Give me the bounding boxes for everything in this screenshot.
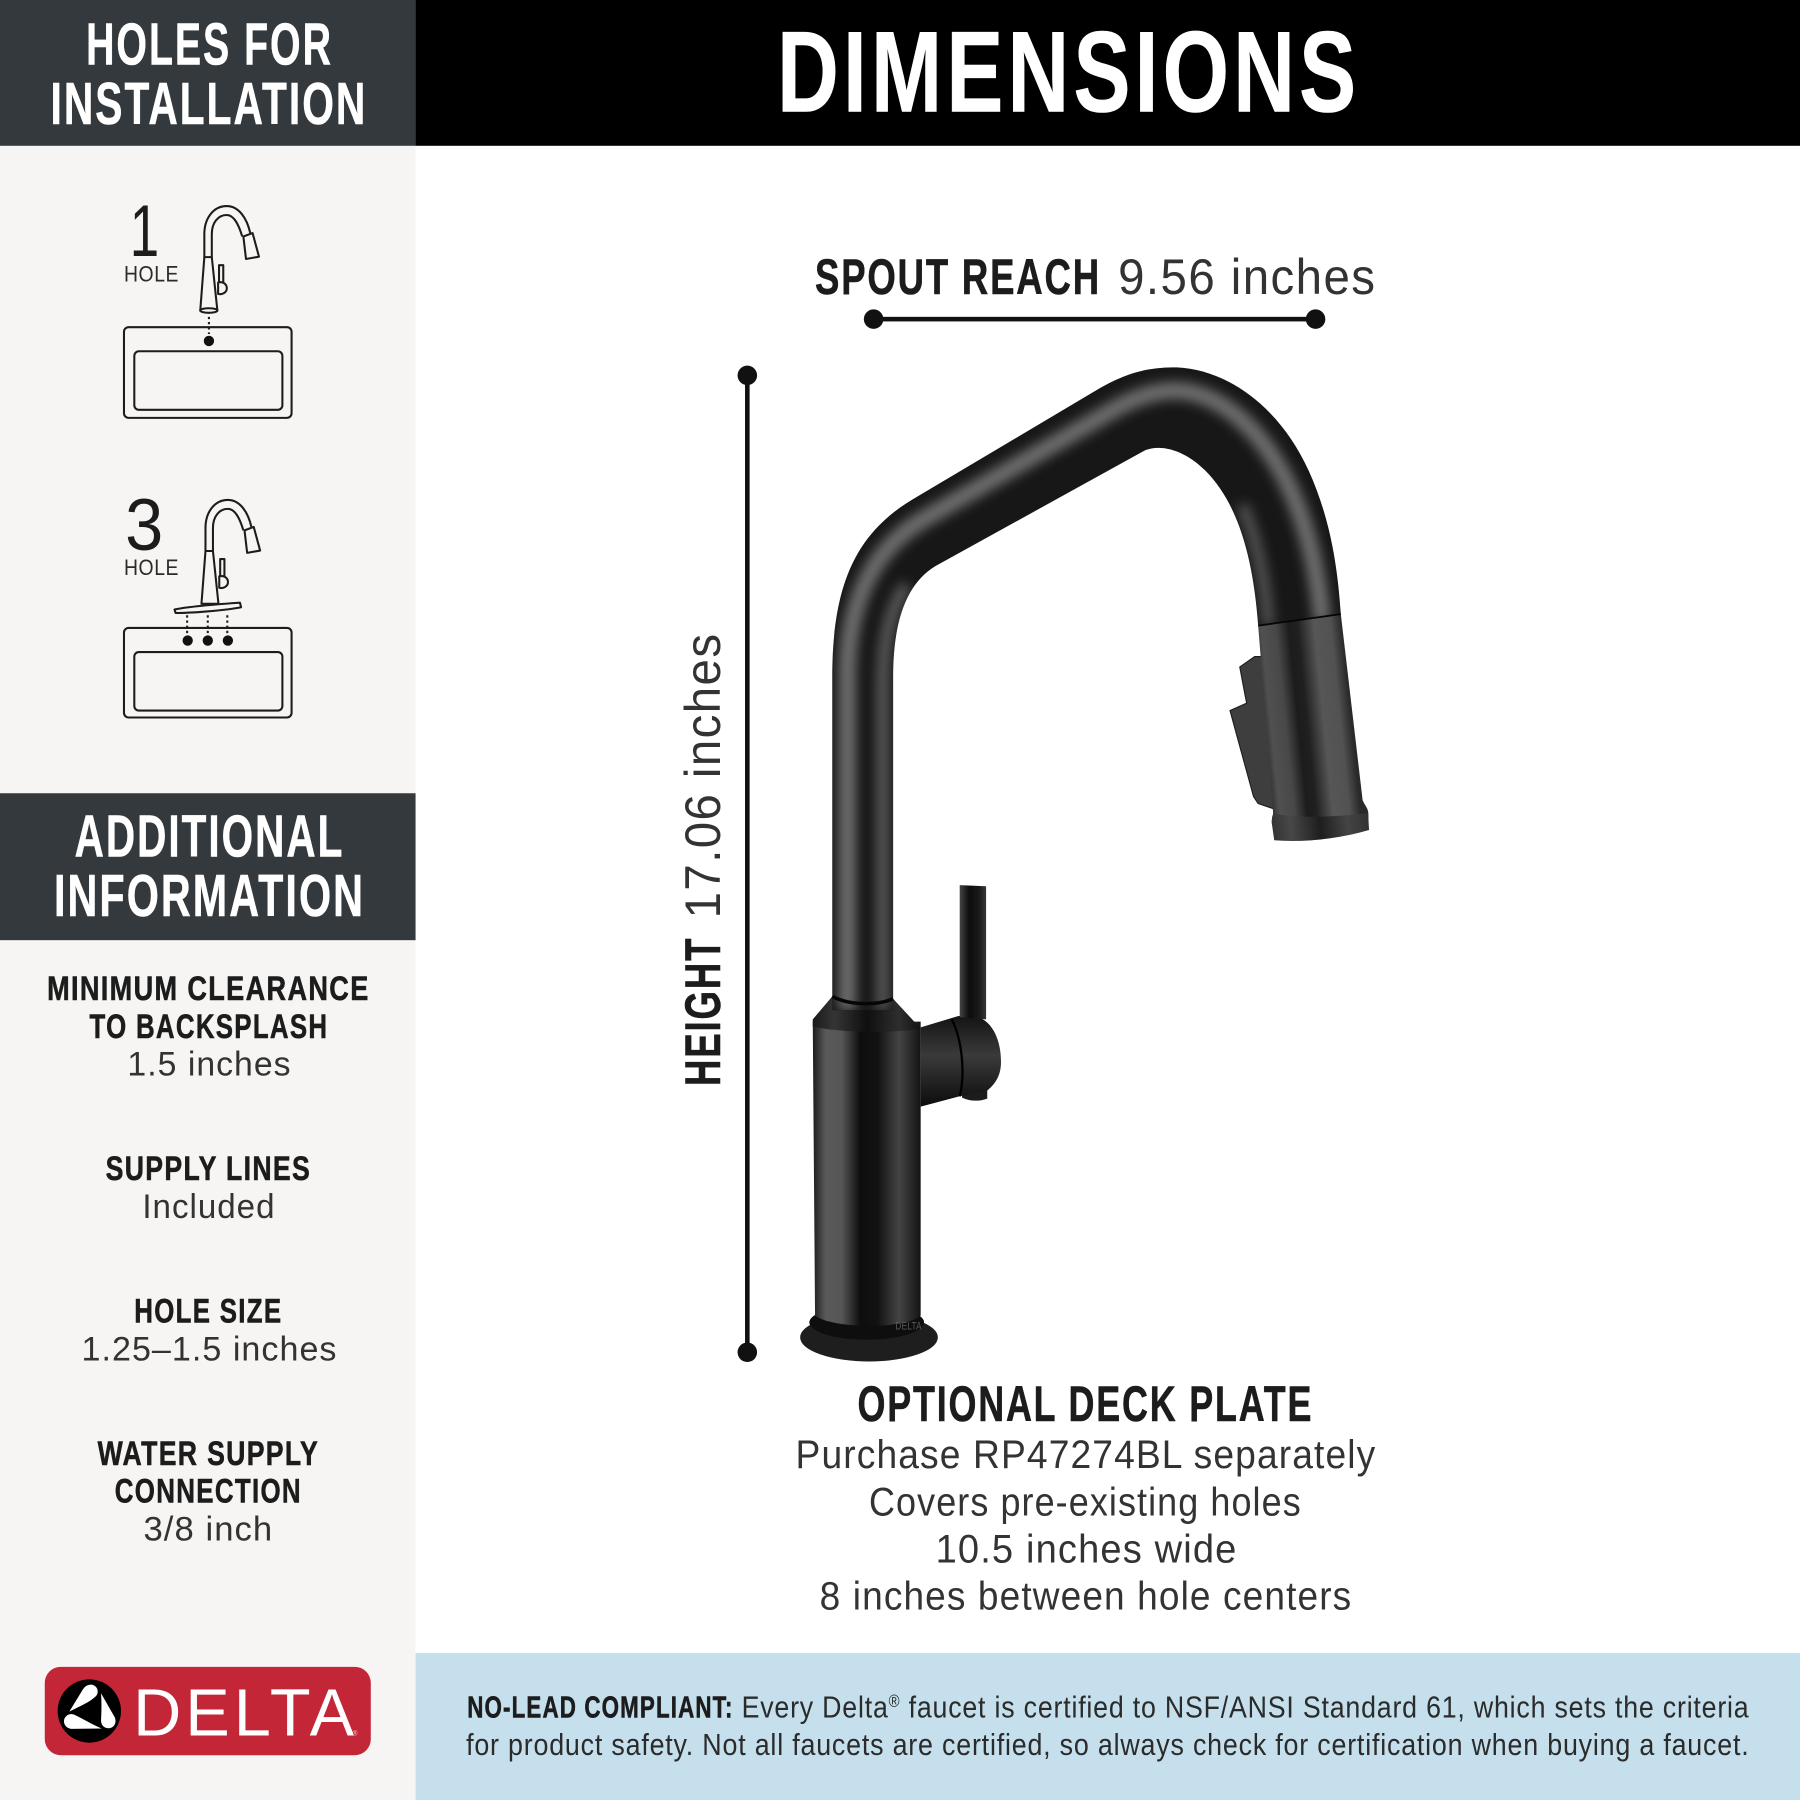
title: dimensions: DIMENSIONS bbox=[777, 8, 1360, 136]
icon: three hole sink and faucet: 3 bbox=[125, 483, 165, 566]
faucet: spray head bbox=[1258, 614, 1368, 829]
text block: minimum clearance: MINIMUM CLEARANCE bbox=[47, 970, 370, 1008]
faucet: spout tube bbox=[832, 367, 1341, 1010]
text block: water supply connection: 3/8 inch bbox=[143, 1511, 273, 1549]
icon: three hole sink and faucet bbox=[124, 483, 292, 717]
icon: three hole sink and faucet: HOLE bbox=[124, 555, 179, 580]
faucet: base cone bbox=[813, 996, 921, 1032]
text block: optional deck plate: OPTIONAL DECK PLATE bbox=[858, 1375, 1313, 1432]
text block: no-lead compliance note: NO-LEAD COMPLIANT: bbox=[467, 1689, 734, 1724]
icon: one hole sink and faucet: 1 bbox=[130, 189, 161, 272]
text block: no-lead compliance note: Every Delta bbox=[742, 1689, 912, 1724]
faucet: handle bbox=[921, 1016, 1001, 1107]
text block: optional deck plate: 10.5 inches wide bbox=[936, 1526, 1238, 1571]
heading: holes for installation: INSTALLATION bbox=[51, 70, 367, 137]
title band bbox=[416, 0, 1800, 146]
heading: additional information bbox=[0, 793, 416, 940]
text block: supply lines bbox=[106, 1150, 311, 1226]
arrow: height dimension line bbox=[738, 366, 757, 1362]
icon: one hole sink and faucet bbox=[124, 189, 292, 418]
text block: hole size: HOLE SIZE bbox=[134, 1292, 282, 1330]
spout reach label: SPOUT REACH bbox=[815, 248, 1101, 305]
panel: left sidebar bbox=[0, 0, 416, 1800]
text block: no-lead compliance note bbox=[466, 1689, 1749, 1762]
faucet illustration bbox=[800, 367, 1369, 1361]
text block: supply lines: SUPPLY LINES bbox=[106, 1150, 311, 1188]
faucet: head seam bbox=[1258, 614, 1341, 626]
logo: delta: DELTA bbox=[133, 1677, 358, 1751]
text block: minimum clearance: 1.5 inches bbox=[127, 1046, 292, 1084]
text block: optional deck plate: 8 inches between hole centers bbox=[820, 1573, 1352, 1618]
text block: minimum clearance bbox=[47, 970, 370, 1084]
arrow: spout reach dimension line bbox=[864, 309, 1325, 329]
heading: holes for installation: HOLES FOR bbox=[86, 10, 333, 77]
heading: additional information: ADDITIONAL bbox=[75, 802, 344, 869]
faucet: base disk bbox=[800, 1305, 938, 1361]
text block: water supply connection bbox=[98, 1435, 319, 1549]
height label bbox=[674, 633, 731, 1086]
panel: no-lead note background bbox=[416, 1653, 1800, 1800]
text block: hole size: 1.25–1.5 inches bbox=[82, 1330, 338, 1368]
heading: additional information: INFORMATION bbox=[54, 862, 365, 929]
height label: HEIGHT bbox=[674, 937, 731, 1086]
text block: no-lead compliance note: ® bbox=[889, 1691, 900, 1711]
faucet: spray rim bbox=[1272, 813, 1369, 841]
icon: one hole sink and faucet: HOLE bbox=[124, 261, 179, 286]
text block: water supply connection: WATER SUPPLY bbox=[98, 1435, 319, 1473]
faucet: lever bbox=[960, 885, 986, 1019]
height label: 17.06 inches bbox=[674, 633, 731, 918]
text block: minimum clearance: TO BACKSPLASH bbox=[90, 1008, 328, 1046]
text block: optional deck plate: Covers pre-existing holes bbox=[869, 1479, 1302, 1524]
text block: optional deck plate bbox=[796, 1375, 1376, 1618]
spout reach label: 9.56 inches bbox=[1118, 248, 1376, 305]
text block: hole size bbox=[82, 1292, 338, 1368]
heading: holes for installation bbox=[0, 0, 416, 146]
faucet: spray buttons bbox=[1230, 657, 1277, 810]
faucet: engraved brand: DELTA bbox=[895, 1320, 922, 1332]
logo: delta bbox=[45, 1667, 371, 1755]
faucet: body bbox=[813, 1022, 921, 1326]
text block: optional deck plate: Purchase RP47274BL separately bbox=[796, 1432, 1376, 1477]
text block: water supply connection: CONNECTION bbox=[115, 1473, 302, 1511]
logo: delta: ® bbox=[352, 1730, 358, 1738]
text block: supply lines: Included bbox=[142, 1188, 276, 1226]
